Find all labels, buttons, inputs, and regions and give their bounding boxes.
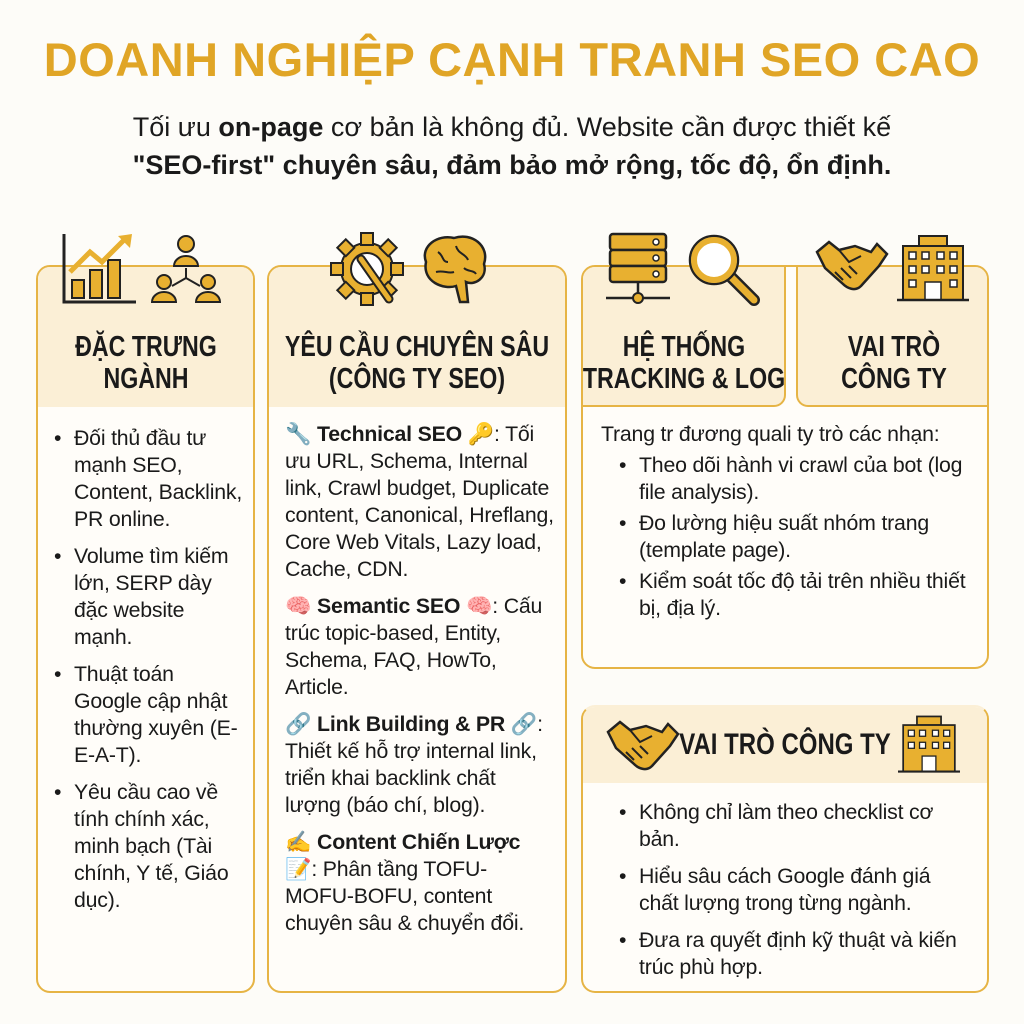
list: dac trung: Đối thủ đầu tư mạnh SEO, Content, Backlink, PR online. [74, 426, 242, 531]
subtitle: Tối ưu on-page cơ bản là không đủ. Website cần được thiết kế [133, 112, 891, 142]
heading: dac trung nganh: ĐẶC TRƯNG [75, 331, 216, 363]
icon: chart [62, 234, 136, 304]
text block: requirements [285, 422, 554, 935]
panel: yeu cau chuyen sau [267, 265, 567, 993]
text block: tracking: Trang tr đương quali ty trò các nhạn: [601, 422, 939, 446]
heading: tracking: TRACKING & LOG [582, 363, 785, 395]
panel: he thong tracking & log [581, 265, 989, 669]
heading: dac trung nganh: NGÀNH [103, 363, 188, 395]
heading: tracking [583, 267, 786, 407]
heading: yeu cau chuyen sau [269, 267, 565, 407]
heading: dac trung nganh [38, 267, 253, 407]
title: DOANH NGHIỆP CẠNH TRANH SEO CAO [44, 33, 980, 86]
panel: vai tro cong ty [581, 705, 989, 993]
subtitle [133, 112, 891, 180]
icon: brain [424, 235, 486, 304]
list: vai tro: Không chỉ làm theo checklist cơ bản. [639, 800, 933, 851]
list: dac trung: Thuật toán Google cập nhật thường xuyên (E-E-A-T). [74, 662, 238, 767]
text block: tracking: Kiểm soát tốc độ tải trên nhiều thiết bị, địa lý. [639, 569, 965, 620]
heading: vai tro cong ty: VAI TRÒ [847, 331, 940, 363]
list: dac trung: Yêu cầu cao về tính chính xác, minh bạch (Tài chính, Y tế, Giáo dục). [74, 780, 228, 912]
text block: tracking: Theo dõi hành vi crawl của bot (log file analysis). [639, 453, 962, 504]
text block: requirements: 🔗 Link Building & PR 🔗: Thiết kế hỗ trợ internal link, triển khai backlink chất lượng (báo chí, blog). [285, 712, 543, 817]
heading: vai tro cong ty: CÔNG TY [841, 363, 946, 395]
icon: server [606, 232, 670, 304]
icon: handshake [816, 240, 889, 290]
heading: yeu cau chuyen sau: (CÔNG TY SEO) [329, 363, 505, 395]
heading: vai tro cong ty: VAI TRÒ CÔNG TY [679, 728, 891, 761]
icon: people network [151, 235, 221, 303]
text block: tracking: Đo lường hiệu suất nhóm trang (template page). [639, 511, 929, 562]
icon: building [897, 235, 969, 302]
list: vai tro: Hiểu sâu cách Google đánh giá chất lượng trong từng ngành. [639, 864, 930, 915]
icon: building small [898, 716, 960, 773]
list: vai tro: Đưa ra quyết định kỹ thuật và kiến trúc phù hợp. [639, 928, 957, 979]
icon: magnifier [688, 234, 760, 306]
text block: requirements: 🔧 Technical SEO 🔑: Tối ưu URL, Schema, Internal link, Crawl budget, Duplicate content, Canonical, Hreflang, Core Web Vitals, Lazy load, Cache, CDN. [285, 422, 554, 581]
list: dac trung: Volume tìm kiếm lớn, SERP dày đặc website mạnh. [74, 544, 228, 649]
list: vai tro [620, 800, 957, 979]
heading: vai tro cong ty [583, 707, 987, 783]
heading: tracking: HỆ THỐNG [622, 331, 745, 363]
icon: gear wrench [330, 232, 404, 306]
subtitle: "SEO-first" chuyên sâu, đảm bảo mở rộng, tốc độ, ổn định. [133, 150, 891, 180]
panel: dac trung nganh [36, 265, 255, 993]
list: dac trung [54, 426, 242, 912]
text block: requirements: ✍️ Content Chiến Lược 📝: Phân tầng TOFU-MOFU-BOFU, content chuyên sâu & chuyển đổi. [285, 830, 524, 935]
heading: vai tro cong ty [796, 267, 989, 407]
text block: tracking [601, 422, 966, 620]
text block: requirements: 🧠 Semantic SEO 🧠: Cấu trúc topic-based, Entity, Schema, FAQ, HowTo, Article. [285, 594, 542, 699]
icon: handshake small [606, 720, 680, 770]
heading: yeu cau chuyen sau: YÊU CẦU CHUYÊN SÂU [285, 331, 549, 363]
